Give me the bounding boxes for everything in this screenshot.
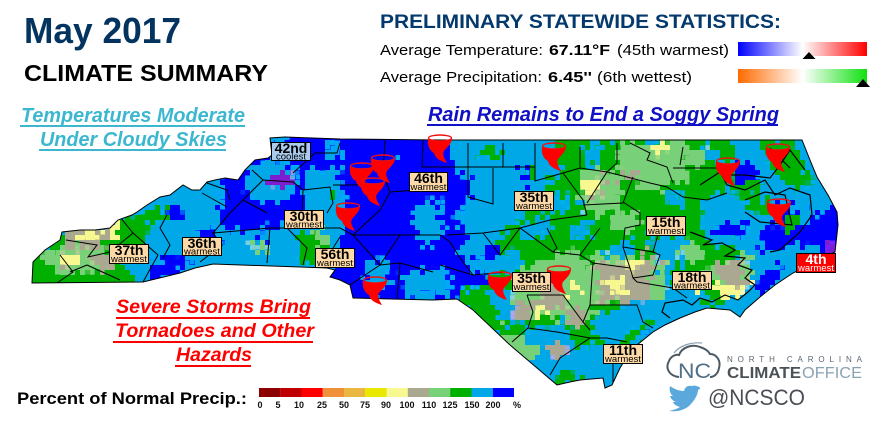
icon: cloud xyxy=(667,343,720,383)
legend: percent of normal precip: 200 xyxy=(485,400,501,410)
temperature rank: 30th warmest xyxy=(284,208,324,230)
statistic: average temperature: (45th warmest) xyxy=(617,43,729,59)
heading: severe storms: Tornadoes and Other xyxy=(115,320,315,342)
temperature rank: 56th warmest xyxy=(316,246,354,269)
temperature rank: 56th warmest: warmest xyxy=(316,258,353,269)
temperature rank: 35th warmest north xyxy=(514,189,554,212)
temperature rank: 18th warmest: warmest xyxy=(673,280,710,292)
temperature rank: 56th warmest: 56th xyxy=(321,246,349,262)
temperature rank: 42nd coolest xyxy=(272,140,310,162)
temperature rank: 42nd coolest: 42nd xyxy=(275,140,307,156)
temperature rank: 35th warmest north: warmest xyxy=(515,201,552,212)
temperature rank: 15th warmest: warmest xyxy=(647,226,684,237)
heading: rain remains: Rain Remains to End a Soggy Spring xyxy=(428,103,779,126)
coastline and sounds xyxy=(662,148,812,318)
temperature rank: 4th warmest: 4th xyxy=(806,251,826,267)
subtitle: climate summary: CLIMATE SUMMARY xyxy=(24,60,268,86)
statistic: average precipitation: (6th wettest) xyxy=(597,70,692,86)
county boundaries xyxy=(57,140,727,382)
temperature rank: 11th warmest xyxy=(604,342,642,365)
map of North Carolina precipitation xyxy=(20,130,850,395)
temperature rank: 35th warmest north: 35th xyxy=(520,189,548,205)
temperature rank: 35th warmest south xyxy=(512,270,550,293)
legend: percent of normal precip: 110 xyxy=(422,400,436,410)
temperature rank: 46th warmest: 46th xyxy=(414,170,443,186)
temperature rank: 46th warmest: warmest xyxy=(410,182,447,193)
heading: severe storms: Hazards xyxy=(176,344,252,366)
legend: percent of normal precip: 150 xyxy=(464,400,480,410)
legend: percent of normal precip: 100 xyxy=(399,400,415,410)
temperature rank: 37th warmest: 37th xyxy=(115,242,143,258)
temperature rank: 37th warmest xyxy=(110,242,148,265)
temperature rank: 35th warmest south: warmest xyxy=(513,282,550,293)
precipitation gradient bar with marker xyxy=(738,69,870,87)
statistic: average temperature: 67.11°F xyxy=(549,43,610,59)
statistic: average temperature xyxy=(380,43,729,59)
temperature rank: 4th warmest xyxy=(796,251,836,274)
temperature rank: 4th warmest: warmest xyxy=(797,263,834,274)
legend: percent of normal precip: 75 xyxy=(360,400,370,410)
temperature rank: 11th warmest: 11th xyxy=(609,342,637,358)
blue precipitation areas xyxy=(150,130,845,337)
temperature rank: 36th warmest xyxy=(182,235,222,258)
tornado markers xyxy=(336,135,791,305)
legend: percent of normal precip: 0 xyxy=(257,400,263,410)
yellow precipitation areas xyxy=(58,142,750,318)
light green precipitation areas xyxy=(40,142,755,365)
text: North Carolina: NORTH CAROLINA xyxy=(727,355,863,364)
logo: NC Climate Office xyxy=(667,343,863,383)
heading: severe storms: Severe Storms Bring xyxy=(116,296,311,318)
cyan patches in the east xyxy=(480,145,728,385)
legend: percent of normal precip: % xyxy=(513,400,521,410)
legend: percent of normal precip xyxy=(17,388,521,410)
heading: temperatures moderate xyxy=(20,105,245,151)
statistic: average precipitation: Average Precipitation: xyxy=(380,70,542,86)
green precipitation areas xyxy=(25,135,815,385)
temperature rank: 30th warmest: warmest xyxy=(285,220,322,230)
temperature rank: 15th warmest xyxy=(646,214,686,237)
text: Climate: CLIMATE xyxy=(727,365,801,382)
heading: temperatures moderate: Temperatures Moderate xyxy=(21,105,245,127)
temperature gradient bar with marker xyxy=(738,42,867,59)
temperature rank: 42nd coolest: coolest xyxy=(276,152,306,162)
legend: percent of normal precip: Percent of Normal Precip.: xyxy=(17,389,247,408)
legend: percent of normal precip: 125 xyxy=(442,400,458,410)
temperature rank: 11th warmest: warmest xyxy=(604,354,641,365)
state outline xyxy=(32,137,838,388)
temperature rank: 46th warmest xyxy=(410,170,448,193)
purple precipitation areas xyxy=(268,170,836,254)
temperature rank: 18th warmest xyxy=(672,269,712,292)
heading: preliminary statewide statistics: PRELIMINARY STATEWIDE STATISTICS: xyxy=(380,12,781,33)
legend: percent of normal precip: 10 xyxy=(294,400,304,410)
icon: cloud: NC xyxy=(678,360,711,383)
temperature rank: 18th warmest: 18th xyxy=(678,269,706,285)
text: Office: OFFICE xyxy=(802,365,862,382)
cyan precipitation patches xyxy=(245,130,488,297)
statistic: average temperature: Average Temperature: xyxy=(380,43,543,59)
legend: percent of normal precip: 25 xyxy=(317,400,327,410)
legend: percent of normal precip: 90 xyxy=(381,400,391,410)
temperature rank: 36th warmest: 36th xyxy=(188,235,216,251)
heading: temperatures moderate: Under Cloudy Skies xyxy=(40,129,227,151)
temperature rank: 35th warmest south: 35th xyxy=(517,270,546,286)
temperature rank: 15th warmest: 15th xyxy=(652,214,680,230)
gray precipitation areas xyxy=(58,168,750,356)
icon: twitter bird xyxy=(669,386,700,411)
text: @NCSCO: @NCSCO xyxy=(708,385,805,410)
legend: percent of normal precip: 5 xyxy=(275,400,281,410)
temperature rank: 36th warmest: warmest xyxy=(183,246,220,258)
statistic: average precipitation xyxy=(380,70,692,86)
heading: severe storms xyxy=(113,296,315,367)
temperature rank: 37th warmest: warmest xyxy=(110,254,147,265)
temperature rank: 30th warmest: 30th xyxy=(290,208,318,224)
statistic: average precipitation: 6.45'' xyxy=(548,70,592,86)
legend: percent of normal precip: 50 xyxy=(339,400,349,410)
title: May 2017: May 2017 xyxy=(24,10,181,51)
